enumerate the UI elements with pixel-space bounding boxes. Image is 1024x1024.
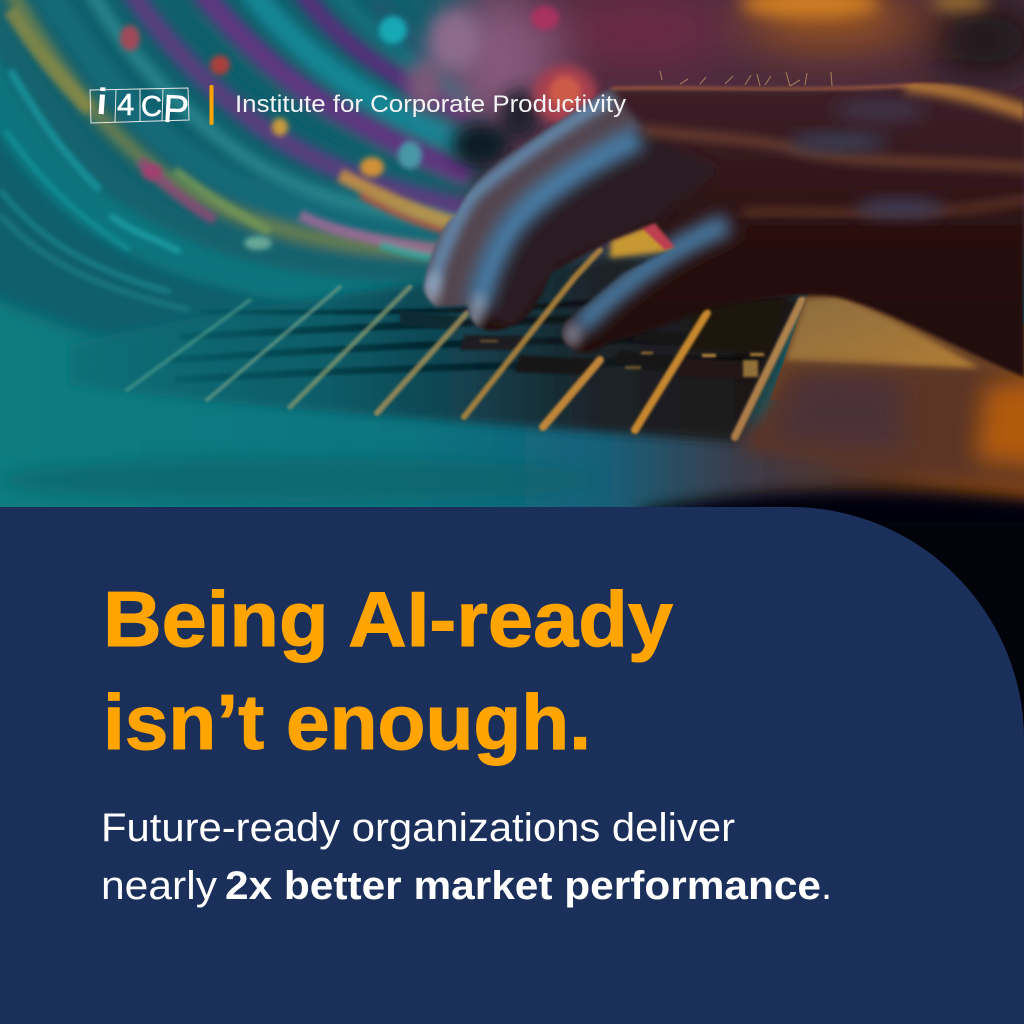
logo mark: i4CP in sketched boxes [90, 81, 190, 132]
arm hairs [660, 71, 832, 86]
keyboard area [70, 255, 806, 442]
black backdrop behind panel corner [790, 522, 1024, 762]
laptop deck [0, 296, 1024, 510]
logo mark: i4CP in sketched boxes: P [162, 88, 190, 132]
subheading [101, 806, 832, 908]
subheading: nearly [101, 864, 217, 908]
bokeh dots [120, 6, 559, 250]
subheading: . [821, 864, 832, 908]
lower finger blue light [578, 224, 728, 328]
navy content panel with rounded top-right corner [0, 507, 1024, 1024]
palm rest base [770, 293, 1024, 400]
bright streak accents [0, 10, 470, 310]
subheading: 2x better market performance [225, 864, 821, 908]
institute name: Institute for Corporate Productivity [235, 91, 626, 118]
headline: Being AI-ready [103, 575, 673, 663]
keyboard key rows [170, 300, 760, 380]
subheading: Future-ready organizations deliver [101, 806, 735, 850]
logo mark: i4CP in sketched boxes: C [141, 91, 162, 123]
headline [103, 575, 673, 766]
back finger blue light [430, 98, 610, 292]
right background [470, 0, 1024, 260]
logo divider [210, 85, 214, 125]
red bokeh behind hand [533, 65, 597, 125]
logo: i4cp wordmark and institute name [90, 81, 626, 132]
glowing key gaps [127, 250, 802, 437]
top rim light [611, 84, 918, 88]
blurred bokeh background, top right [440, 0, 1024, 130]
knuckle creases and cool reflections [643, 130, 1024, 168]
colourful light streaks on the screen [0, 0, 500, 295]
fingertip light [422, 268, 448, 308]
colourful gap between fingers [610, 223, 680, 258]
hero photo: hand typing on a laptop keyboard [0, 0, 1024, 560]
palm rest [740, 368, 1024, 490]
back finger face [420, 87, 643, 310]
middle finger body [483, 133, 706, 330]
logo mark: i4CP in sketched boxes: i [95, 81, 109, 122]
middle finger blue light [478, 137, 640, 306]
logo mark: i4CP in sketched boxes: 4 [117, 87, 134, 122]
bottom fade of the photo to black [635, 480, 1024, 522]
small keycap glow marks [480, 340, 764, 377]
hand [410, 70, 1024, 390]
headline: isn’t enough. [103, 678, 591, 766]
individual keys [400, 300, 786, 380]
